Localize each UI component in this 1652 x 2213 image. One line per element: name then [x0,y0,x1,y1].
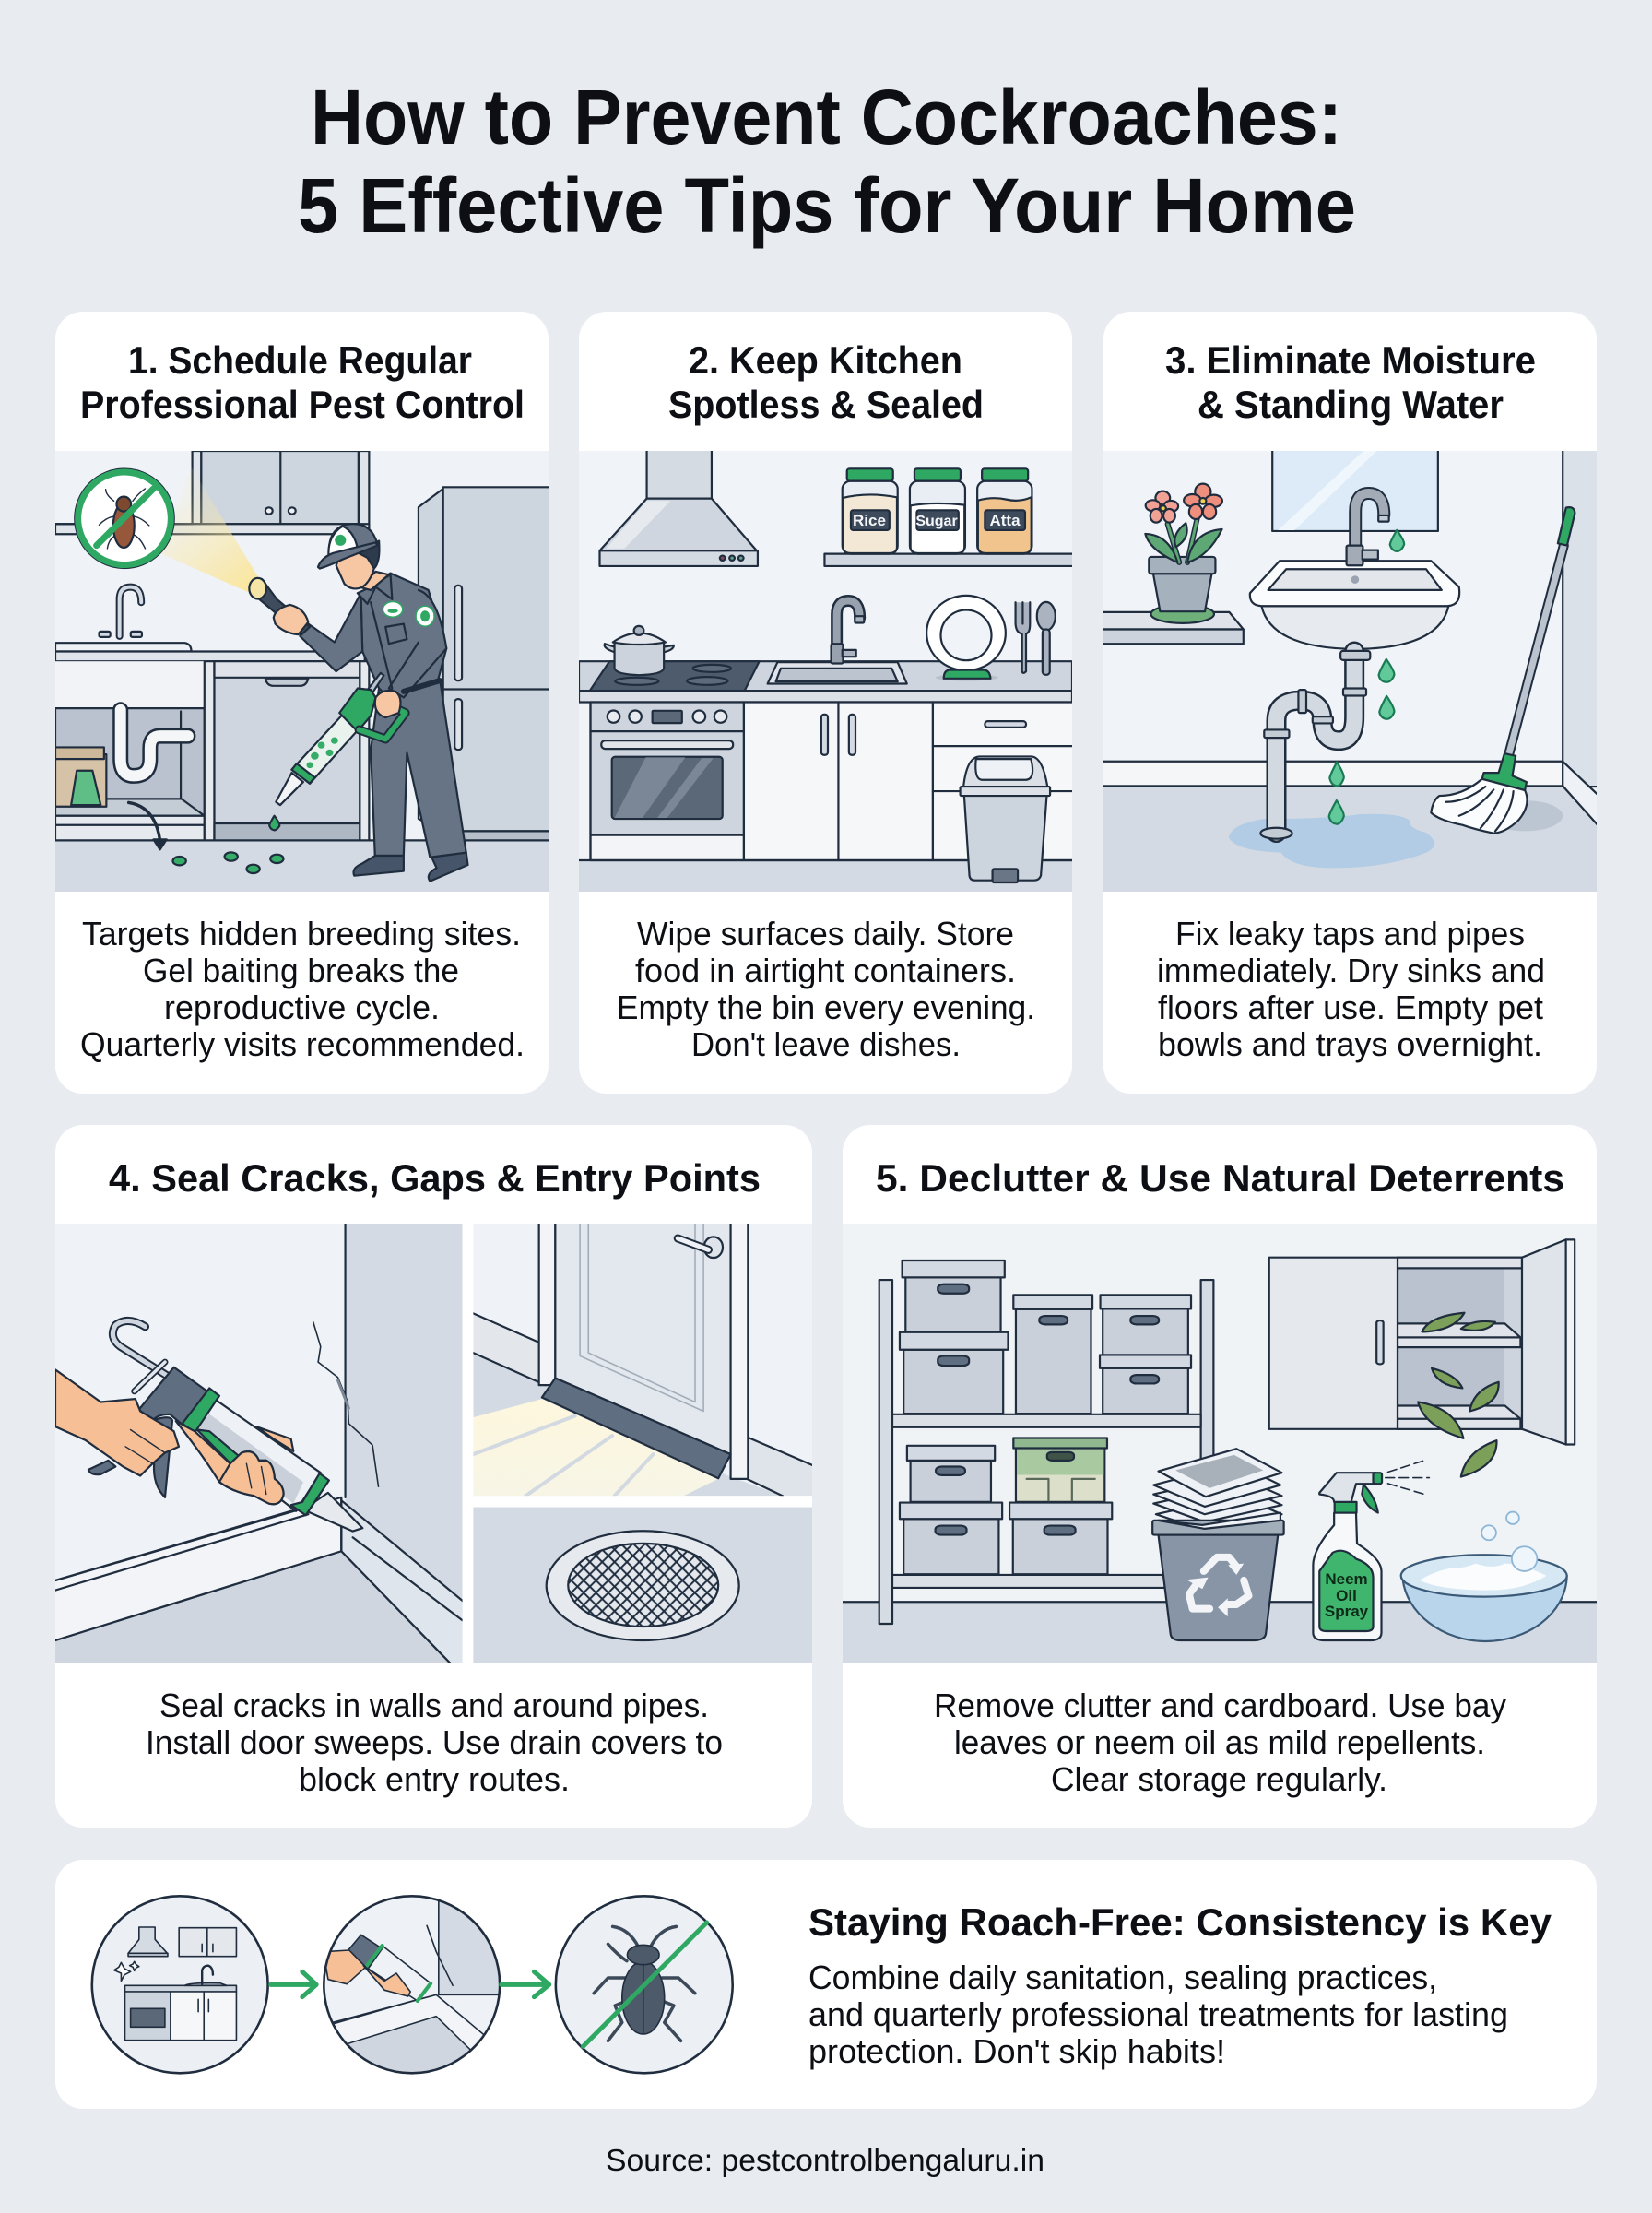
spray label text [1325,1570,1369,1620]
mop shadow [1487,800,1563,831]
summary text [808,1959,1508,2070]
technician [300,574,468,882]
panel: tip 3 moisture [1100,312,1599,1094]
oven [590,702,744,835]
summary text: and quarterly professional treatments for lasting [808,1995,1508,2033]
body text: tip 3: immediately. Dry sinks and [1157,952,1545,989]
bay leaves [1418,1313,1499,1477]
mirror [1272,449,1438,531]
spray mist [1386,1461,1429,1495]
body text: tip 5: leaves or neem oil as mild repellents. [954,1723,1485,1761]
body text: tip 3: bowls and trays overnight. [1158,1025,1542,1063]
drain cover [473,1508,820,1670]
no roach sign [78,472,171,565]
title: How to Prevent Cockroaches: [311,74,1342,160]
heading: tip 1: 1. Schedule Regular [128,338,472,382]
plate and cutlery [936,674,998,680]
hands [256,1426,293,1451]
body text: tip 3 [1157,915,1545,1063]
heading: tip 3 [1165,338,1536,426]
icon: clean kitchen [92,1896,268,2073]
spray label text: Neem [1325,1570,1368,1588]
bait drops [173,816,284,873]
bubbles [1481,1512,1537,1571]
panel: tip 5 declutter [843,1125,1597,1828]
summary text: Combine daily sanitation, sealing practices, [808,1959,1437,1996]
shelving [1201,1280,1213,1471]
heading: tip 4: 4. Seal Cracks, Gaps & Entry Points [109,1156,761,1200]
spray bottle [1313,1513,1382,1640]
heading: tip 1 [80,338,525,426]
flashlight beam [160,467,260,593]
cabinets [744,702,933,860]
heading: tip 2: Spotless & Sealed [668,383,984,426]
heading: tip 1: Professional Pest Control [80,383,525,426]
recycling bin [1159,1535,1278,1640]
jar labels: Sugar [915,514,958,529]
puddle [1229,814,1434,868]
body text: tip 3: floors after use. Empty pet [1158,988,1543,1026]
panel: tip 2 kitchen [579,312,1075,1094]
newspapers [1153,1449,1282,1530]
body text: tip 5 [934,1686,1507,1798]
illustration: storage boxes, bay leaves, neem spray [843,1224,1597,1663]
illustration: leaking bathroom sink with mop and puddle [1100,449,1599,892]
title: 5 Effective Tips for Your Home [298,162,1356,249]
process icons: clean kitchen, seal gaps, no roaches [92,1890,733,2081]
box and cup [55,754,106,807]
shelf [824,554,1075,566]
panel: summary [55,1860,1597,2109]
title [298,74,1356,249]
illustration: clean kitchen with jars, hood, oven and bin [579,449,1075,892]
bowl [1402,1576,1567,1641]
body text: tip 4: Seal cracks in walls and around pipes. [159,1686,709,1724]
body text: tip 2: Don't leave dishes. [691,1025,961,1063]
body text: tip 1: reproductive cycle. [164,988,440,1026]
jars [843,481,898,554]
pot [605,644,674,652]
body text: tip 3: Fix leaky taps and pipes [1175,915,1525,953]
icon: no roaches [556,1896,733,2073]
body text: tip 2: Wipe surfaces daily. Store [637,915,1014,953]
dishwasher [214,661,360,840]
body text: tip 5: Remove clutter and cardboard. Use bay [934,1686,1507,1724]
summary heading: Staying Roach-Free: Consistency is Key [808,1900,1552,1944]
body text: tip 1: Targets hidden breeding sites. [82,915,521,953]
heading: tip 3: 3. Eliminate Moisture [1165,338,1536,382]
sink [1261,606,1448,649]
body text: tip 1: Gel baiting breaks the [143,952,459,989]
sink pipe [121,710,188,775]
body text: tip 4 [146,1686,723,1798]
arrow [129,802,160,840]
body text: tip 2: food in airtight containers. [635,952,1016,989]
heading: tip 5: 5. Declutter & Use Natural Deterrents [876,1156,1564,1200]
arrow [502,1971,549,1997]
faucet [837,601,860,657]
heading: tip 2 [668,338,984,426]
lower cabinet [55,661,205,708]
fridge [419,489,443,831]
hood [647,449,712,499]
panel: tip 4 seal cracks [37,1125,820,1828]
bin [963,756,1047,787]
summary text: protection. Don't skip habits! [808,2032,1225,2070]
shelf and flower pot [1100,612,1244,630]
jar labels: Atta [989,512,1021,529]
body text: tip 1 [80,915,525,1063]
counter [579,661,1072,691]
body text: tip 2 [617,915,1035,1063]
illustration: caulk gun, door sweep and drain cover [37,1221,820,1670]
body text: tip 5: Clear storage regularly. [1051,1760,1387,1798]
door scene [473,1224,812,1496]
body text: tip 2: Empty the bin every evening. [617,988,1035,1026]
mop [1508,546,1564,756]
panel: tip 1 professional pest control [55,312,552,1094]
illustration: technician applying gel bait in a kitchen [55,451,552,892]
body text: tip 4: Install door sweeps. Use drain covers to [146,1723,723,1761]
jar labels [853,512,1021,529]
body text: tip 1: Quarterly visits recommended. [80,1025,525,1063]
gutters [463,1221,473,1670]
drops [1329,530,1404,824]
boxes [900,1260,1191,1574]
faucet and counter [120,587,141,636]
wall crack [313,1322,378,1486]
icon: seal gaps [324,1890,507,2081]
heading: tip 3: & Standing Water [1198,383,1504,426]
spray label text: Oil [1336,1587,1357,1604]
pipes [1276,652,1354,833]
caulk gun [303,1493,362,1532]
flashlight [254,579,310,634]
body text: tip 4: block entry routes. [299,1760,570,1798]
arrow [271,1971,316,1997]
wall cabinet [1398,1258,1522,1429]
faucet [1355,493,1384,556]
gel gun [276,773,303,805]
source line: Source: pestcontrolbengaluru.in [606,2143,1044,2177]
upper cabinets [201,451,359,524]
jar labels: Rice [853,512,886,529]
spray label text: Spray [1325,1603,1369,1620]
heading: tip 2: 2. Keep Kitchen [689,338,962,382]
